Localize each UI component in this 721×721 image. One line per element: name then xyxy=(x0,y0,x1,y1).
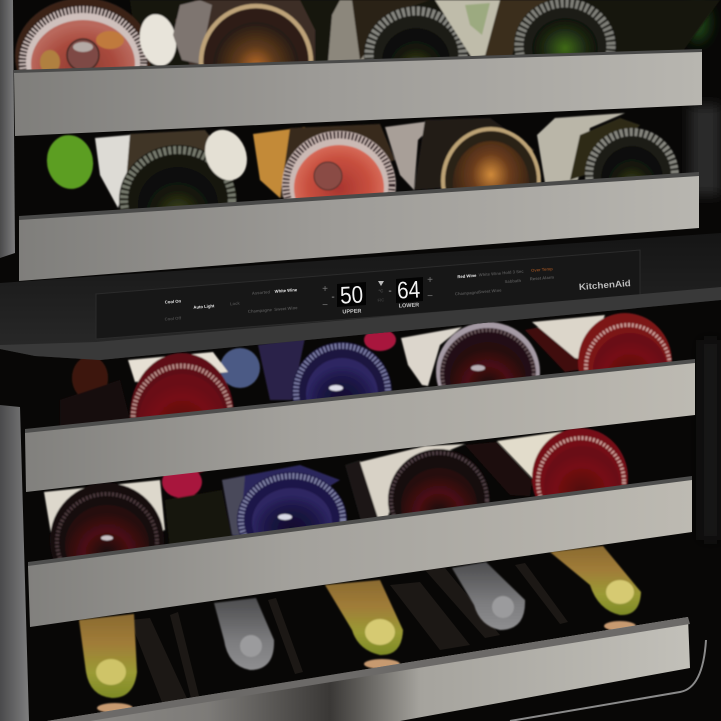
control band lower lip xyxy=(0,287,721,360)
lower plus and minus buttons: + xyxy=(427,275,433,286)
label: upper: UPPER xyxy=(342,309,362,315)
upper plus and minus buttons xyxy=(322,284,335,311)
labels: Sweet Wine xyxy=(478,288,502,294)
bottles row 4 xyxy=(44,428,628,597)
labels: Assorted xyxy=(252,289,271,296)
bottle: amber with label xyxy=(173,0,315,120)
labels: White Wine xyxy=(478,271,502,277)
shelf 3 xyxy=(25,359,695,492)
labels: Cool Off xyxy=(164,315,182,322)
capsule: pink xyxy=(364,329,396,351)
capsule: green xyxy=(43,131,97,193)
door frame lower right xyxy=(510,640,706,721)
label: lower: LOWER xyxy=(399,302,419,310)
labels: Over Temp xyxy=(531,266,553,273)
icon: cooling triangle xyxy=(378,281,384,286)
labels: Champagne xyxy=(248,307,273,314)
shelf 4 xyxy=(28,476,692,627)
dark bottle body xyxy=(465,442,532,496)
lower plus and minus buttons: − xyxy=(427,291,433,302)
bottle: purple lower xyxy=(222,465,347,568)
bottle: maroon xyxy=(401,322,540,422)
bottle: purple xyxy=(258,338,392,442)
display: lower xyxy=(396,277,423,303)
bottle neck: gold centre xyxy=(325,580,403,655)
temperature readout: 50: 50 xyxy=(339,281,364,310)
bottles row 3 xyxy=(60,313,672,477)
labels xyxy=(164,266,554,322)
upper plus and minus buttons: + xyxy=(322,284,328,295)
bottle: red left xyxy=(128,352,234,477)
bottle neck: silver right xyxy=(452,562,525,630)
bottle: silver ribbed right xyxy=(537,113,679,222)
bottle: red top left xyxy=(15,0,151,118)
capsule: white xyxy=(136,11,180,69)
bottle: orange label red xyxy=(253,124,396,239)
upper plus and minus buttons: - xyxy=(331,292,335,303)
shelf 5 glow spots xyxy=(97,621,636,713)
shelf 2 xyxy=(19,172,699,281)
lower rack rails xyxy=(130,563,568,710)
bottle: maroon left xyxy=(44,480,165,597)
labels: Sabbath xyxy=(504,278,522,284)
bottle: dark silver ribbed xyxy=(328,0,468,104)
right wall glow xyxy=(686,2,721,540)
bottle neck: gold left xyxy=(79,614,137,698)
champagne bottle necks xyxy=(79,546,641,698)
KitchenAid logo: KitchenAid xyxy=(578,278,631,292)
capsule: pink xyxy=(162,466,202,498)
bottles row 1 xyxy=(15,0,720,120)
dark rack gap xyxy=(345,460,380,525)
bottles row 2 xyxy=(43,113,679,255)
bottle: maroon centre xyxy=(360,444,490,551)
labels: Red Wine xyxy=(457,273,477,279)
lower plus and minus buttons xyxy=(388,275,433,302)
labels: Sweet Wine xyxy=(274,305,298,312)
bottle: grey label amber xyxy=(385,118,541,235)
control band xyxy=(0,233,721,360)
shelf 5 xyxy=(47,617,690,721)
left frame upper xyxy=(0,0,15,258)
display: upper xyxy=(337,282,366,307)
dim bottle body xyxy=(165,490,232,550)
bottle neck: silver left xyxy=(214,598,274,670)
dim bottle bodies xyxy=(60,380,130,435)
bottle: white label dark green xyxy=(95,130,237,255)
bottle: pale label green xyxy=(435,0,616,94)
capsule: dark red xyxy=(72,356,108,400)
labels: °C xyxy=(378,288,383,294)
upper plus and minus buttons: − xyxy=(322,300,328,311)
labels: White Wine xyxy=(274,287,298,294)
bottle: bright red lower xyxy=(497,428,628,528)
labels: Lock xyxy=(230,301,241,306)
capsule: white xyxy=(198,123,254,187)
bottle neck: gold right xyxy=(550,546,641,615)
bottle: dark red strip xyxy=(525,326,590,372)
labels: Champagne xyxy=(455,290,480,296)
control panel xyxy=(96,250,640,339)
labels: Cool On xyxy=(165,298,182,305)
bottle: bright red right xyxy=(532,313,672,411)
dim background bottles xyxy=(130,0,720,70)
labels: Auto Light xyxy=(193,303,215,310)
temperature readout: 64: 64 xyxy=(396,276,421,305)
labels: Hold 3 Sec xyxy=(502,269,524,275)
labels: Reset Alarm xyxy=(530,275,554,281)
capsule: blue xyxy=(220,348,260,388)
left frame lower xyxy=(0,405,29,721)
labels: F/C xyxy=(377,297,384,303)
shelf 1 xyxy=(14,49,702,136)
lower plus and minus buttons: - xyxy=(388,286,392,297)
